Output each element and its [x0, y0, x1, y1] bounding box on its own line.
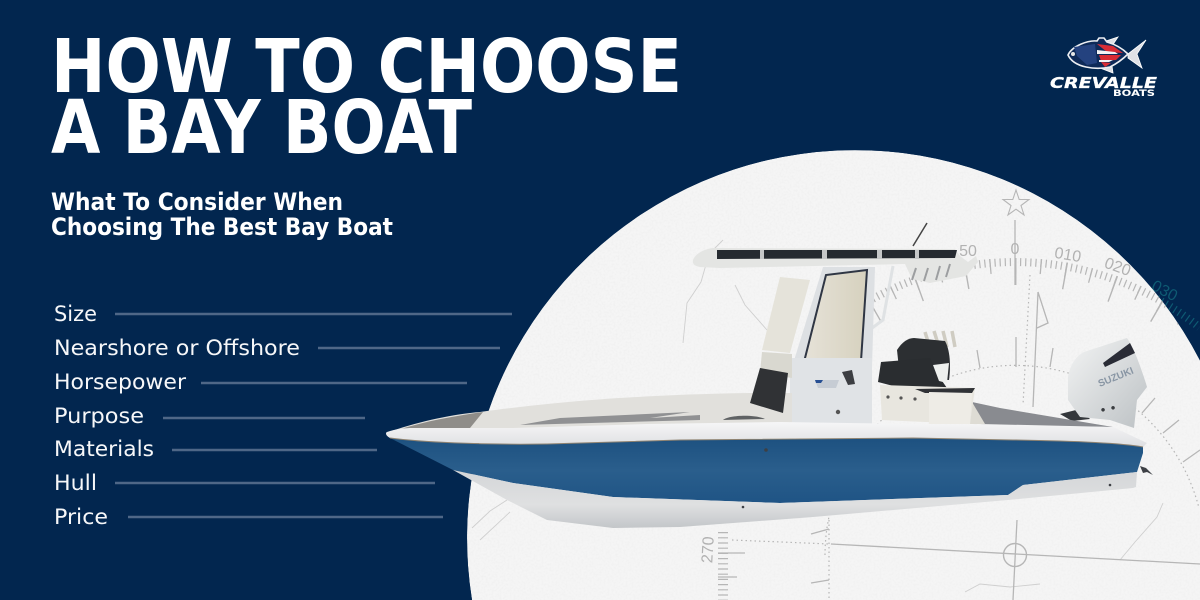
dial numbers: [699, 241, 1133, 564]
list of considerations: Horsepower: [54, 370, 186, 395]
title: A BAY BOAT: [51, 85, 472, 171]
list of considerations: Nearshore or Offshore: [54, 336, 300, 361]
dial numbers: 50: [959, 243, 977, 260]
list of considerations: Purpose: [54, 404, 144, 429]
logo: [1050, 37, 1157, 99]
subtitle: Choosing The Best Bay Boat: [51, 213, 393, 241]
t-top canopy: [693, 248, 978, 331]
panel: marble circle: [467, 150, 1200, 600]
list of considerations: Hull: [54, 471, 97, 496]
dial numbers: 020: [1102, 255, 1133, 280]
title: [51, 24, 682, 171]
logo wordmark: CREVALLE: [1050, 74, 1157, 92]
storage bag: [750, 368, 788, 413]
antenna: [913, 223, 927, 246]
list of considerations: Price: [54, 505, 108, 530]
title: HOW TO CHOOSE: [51, 24, 682, 110]
list of considerations: Materials: [54, 437, 154, 462]
compass dial extension on navy: [827, 262, 1199, 331]
compass dial extension on navy: 030: [1149, 278, 1180, 305]
helm seat: [878, 331, 975, 424]
console: [760, 267, 875, 424]
subtitle: What To Consider When: [51, 188, 343, 216]
dial numbers: 270: [699, 536, 718, 564]
outboard motor: [1060, 338, 1147, 428]
deck details: [398, 402, 1113, 430]
deck: [392, 393, 792, 434]
logo: BOATS: [1113, 89, 1155, 99]
subtitle: [51, 188, 393, 241]
gunwale band: [386, 422, 1147, 447]
boat: [386, 223, 1153, 528]
side window pane: [762, 277, 810, 353]
list of considerations: [54, 302, 512, 530]
lower hull: [453, 470, 1137, 528]
marble veins: [472, 240, 1163, 592]
dial numbers: 010: [1053, 245, 1082, 266]
list of considerations: Size: [54, 302, 97, 327]
blue hull: [390, 438, 1143, 503]
hull fittings: [742, 448, 1153, 508]
outboard motor: SUZUKI: [1097, 366, 1136, 390]
dial numbers: 0: [1011, 241, 1020, 258]
icon: fish with flag: [1068, 37, 1146, 73]
gunwale pinstripe: [390, 438, 1143, 447]
compass rose and dial: [718, 190, 1200, 600]
